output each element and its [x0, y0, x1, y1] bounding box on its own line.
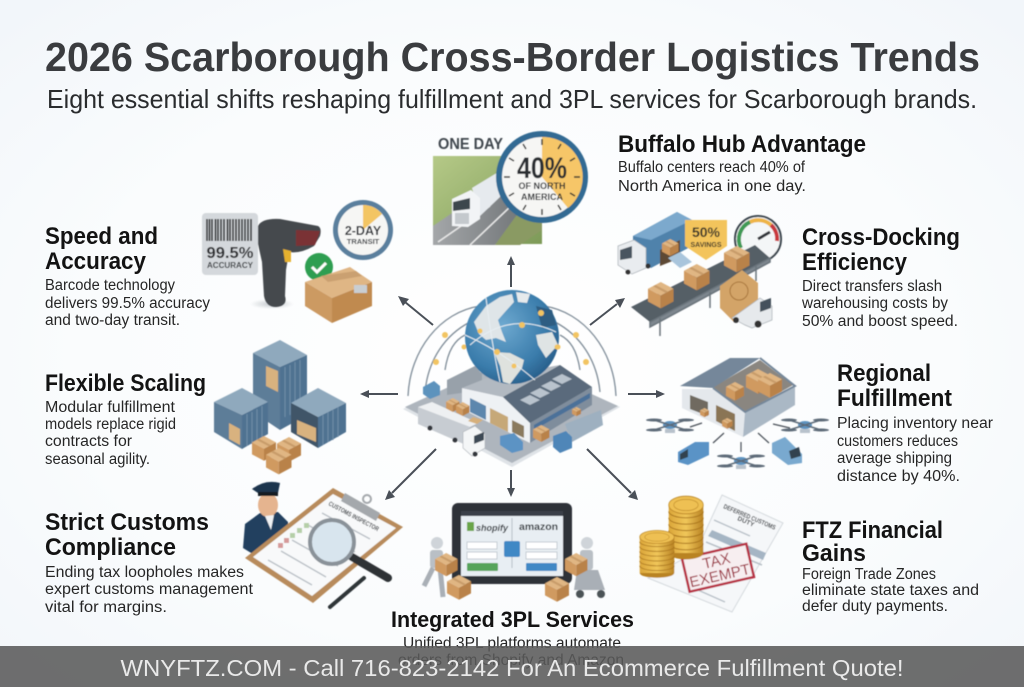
panel: Regional Fulfillment: customers reduces — [837, 433, 958, 450]
2-day clock: TRANSIT — [347, 237, 380, 246]
2-day clock: 2-DAY — [345, 224, 382, 238]
checkmark — [305, 253, 333, 281]
tax exempt stamp: EXEMPT — [688, 561, 752, 591]
cardboard box — [305, 267, 372, 323]
drones — [646, 418, 829, 469]
badge: 50% savings: 50% — [692, 224, 721, 240]
panel: Buffalo Hub Advantage — [618, 131, 866, 195]
tablet: shopify — [476, 523, 509, 533]
tax document: DUTY — [736, 515, 756, 529]
heading: Strict Customs Compliance: Strict Customs — [45, 509, 209, 536]
robots — [424, 537, 605, 598]
scanner — [250, 219, 321, 309]
panel: Speed and Accuracy: and two-day transit. — [45, 312, 180, 329]
top container — [253, 340, 307, 430]
panel: FTZ Financial Gains: defer duty payments. — [802, 598, 948, 615]
central hub: globe over warehouse — [403, 290, 620, 467]
tax document: DEFERRED CUSTOMS — [722, 503, 777, 532]
tablet: amazon — [519, 521, 558, 533]
clipboard — [245, 488, 403, 603]
icon: one-day truck and clock — [433, 131, 588, 245]
customs officer — [243, 482, 288, 556]
icon: cross-dock conveyor — [618, 212, 781, 336]
panel: Regional Fulfillment: Fulfillment — [837, 385, 952, 412]
panel: FTZ Financial Gains: Gains — [802, 540, 866, 567]
title: 2026 Scarborough Cross-Border Logistics Trends — [45, 34, 980, 80]
clock: 40% of North America — [496, 131, 588, 223]
hub warehouse — [447, 365, 592, 443]
icon: stacked containers — [214, 340, 346, 474]
one day photo — [433, 156, 542, 245]
description: Regional Fulfillment: Placing inventory near — [837, 415, 993, 432]
panel: Flexible Scaling: seasonal agility. — [45, 451, 150, 468]
tax exempt stamp: TAX — [701, 550, 732, 573]
icon: customs clipboard — [243, 482, 403, 607]
panel: Cross-Docking Efficiency: 50% and boost speed. — [802, 313, 958, 330]
footer banner — [0, 646, 1024, 687]
panel: Speed and Accuracy: delivers 99.5% accuracy — [45, 295, 210, 312]
magnifying glass — [310, 520, 388, 578]
barcode label: ACCURACY — [207, 261, 254, 270]
clock: 40% of North America: 40% — [517, 152, 567, 185]
description: FTZ Financial: Foreign Trade Zones — [802, 566, 936, 583]
panel: Strict Customs Compliance: vital for margins. — [45, 599, 167, 616]
description: Flexible Scaling: Modular fulfillment — [45, 399, 176, 416]
hub globe — [465, 290, 560, 384]
badge: 50% savings — [685, 220, 727, 260]
panel: Regional Fulfillment: average shipping — [837, 450, 952, 467]
barcode label: 99.5% — [206, 245, 254, 262]
icon: regional warehouse with drones and vans — [646, 358, 829, 469]
footer banner: WNYFTZ.COM - Call 716-823-2142 For An Ecommerce Fulfillment Quote! — [120, 655, 903, 681]
panel: Cross-Docking Efficiency: warehousing costs by — [801, 295, 948, 312]
label: ONE DAY: ONE DAY — [438, 136, 503, 153]
panel: FTZ Financial Gains: eliminate state taxes and — [802, 582, 979, 599]
panel: Regional Fulfillment — [837, 360, 993, 485]
hub network arcs — [408, 306, 616, 396]
description: Integrated 3PL: Unified 3PL platforms automate — [403, 635, 621, 652]
panel: Speed and Accuracy — [45, 223, 210, 329]
clock: 40% of North America: OF NORTH — [518, 181, 566, 191]
tax document — [648, 495, 783, 612]
conveyor with boxes — [631, 245, 770, 336]
heading: Integrated 3PL Services: Integrated 3PL Services — [391, 607, 634, 632]
left container — [214, 388, 268, 449]
right container — [291, 388, 346, 448]
icon: tablet with robots — [424, 503, 605, 602]
gold coin stacks — [640, 496, 703, 578]
clock: 40% of North America: AMERICA — [521, 192, 563, 202]
arrows from hub to each trend — [360, 256, 665, 500]
panel: Flexible Scaling: models replace rigid — [45, 416, 176, 433]
tablet — [452, 503, 572, 584]
panel: Integrated 3PL Services — [391, 607, 634, 669]
vans — [678, 437, 802, 465]
heading: Speed and Accuracy: Speed and — [45, 223, 158, 250]
cardboard boxes — [435, 553, 588, 602]
icon: coins and tax exempt document — [640, 495, 783, 612]
heading: Flexible Scaling: Flexible Scaling — [45, 370, 206, 397]
hub platform — [403, 358, 620, 467]
gauge — [735, 216, 781, 262]
heading: FTZ Financial Gains: FTZ Financial — [802, 517, 943, 544]
barcode label — [202, 213, 258, 275]
subtitle: Eight essential shifts reshaping fulfillment and 3PL services for Scarborough brands. — [47, 84, 977, 114]
badge: 50% savings: SAVINGS — [690, 242, 722, 249]
description: Cross-Docking: Direct transfers slash — [802, 278, 942, 295]
delivery truck — [720, 270, 772, 328]
panel: Flexible Scaling — [45, 370, 206, 468]
panel: FTZ Financial Gains — [802, 517, 979, 615]
heading: Regional Fulfillment: Regional — [837, 360, 931, 387]
panel: Flexible Scaling: contracts for — [45, 433, 132, 450]
description: Speed and Accuracy: Barcode technology — [45, 277, 175, 294]
clipboard: CUSTOMS INSPECTOR — [327, 501, 380, 533]
tax exempt stamp — [682, 544, 754, 592]
description: Strict Customs: Ending tax loopholes makes — [45, 564, 244, 581]
heading: Buffalo Hub Advantage: Buffalo Hub Advantage — [618, 131, 866, 158]
heading: Cross-Docking Efficiency: Cross-Docking — [802, 224, 960, 251]
blue container truck — [618, 212, 692, 274]
panel: Strict Customs Compliance — [45, 509, 254, 616]
2-day clock — [333, 200, 393, 260]
hub trucks and cargo — [418, 381, 603, 456]
delivery arrows — [690, 423, 790, 452]
warehouse — [680, 358, 795, 437]
cardboard boxes — [252, 436, 301, 474]
icon: barcode scanner, clock and box — [202, 200, 393, 323]
pen — [330, 578, 364, 607]
panel: Strict Customs Compliance: expert customs management — [45, 581, 254, 598]
description: Buffalo Hub: Buffalo centers reach 40% of — [618, 159, 806, 176]
panel: Speed and Accuracy: Accuracy — [45, 248, 147, 275]
panel: Regional Fulfillment: distance by 40%. — [837, 468, 960, 485]
panel: Strict Customs Compliance: Compliance — [45, 534, 176, 561]
panel: Integrated 3PL Services: orders from Shopify and Amazon — [398, 652, 624, 669]
panel: Cross-Docking Efficiency: Efficiency — [802, 249, 908, 276]
panel: Cross-Docking Efficiency — [801, 224, 960, 330]
panel: Buffalo Hub Advantage: North America in one day. — [618, 178, 806, 195]
